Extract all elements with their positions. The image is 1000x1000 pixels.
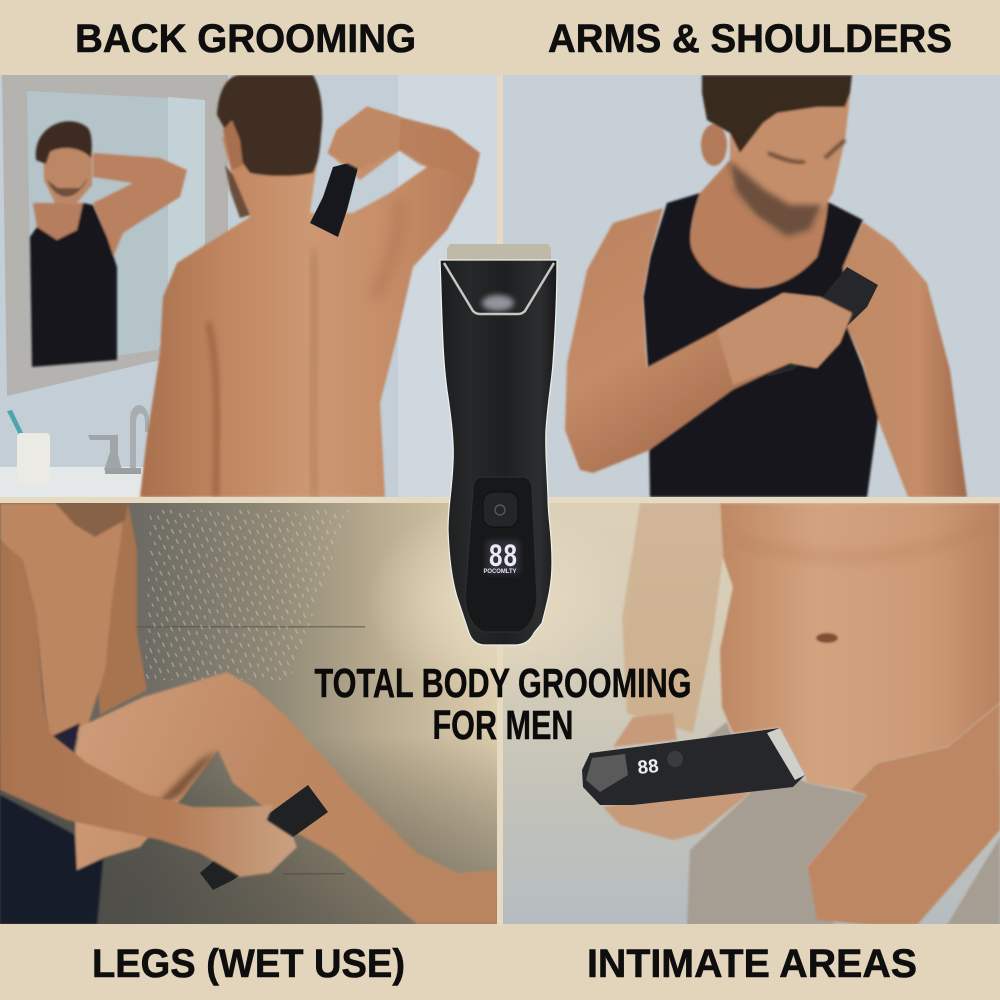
man in shower (0, 503, 497, 924)
small trimmer (767, 267, 878, 377)
panel: intimate areas photo (503, 503, 1000, 925)
shadow under knee (159, 750, 216, 802)
trimmer held horizontally: 88 (637, 756, 660, 779)
heading: legs: LEGS (WET USE) (92, 942, 405, 986)
heading: arms and shoulders: ARMS & SHOULDERS (548, 17, 952, 61)
toothbrush (7, 410, 23, 434)
cutting blade (447, 244, 551, 260)
faucet (130, 405, 149, 470)
heading: intimate areas: INTIMATE AREAS (587, 942, 917, 986)
shorts top (48, 723, 80, 752)
raised leg (75, 672, 497, 924)
centre caption: FOR MEN (432, 702, 574, 748)
panel: back grooming photo (0, 75, 497, 497)
man in black tank top (643, 75, 967, 497)
centre caption (314, 660, 692, 748)
beard (55, 503, 128, 537)
horizontal gutter (0, 497, 1000, 503)
vertical gutter (497, 75, 503, 925)
tank top (643, 193, 878, 497)
centre caption: TOTAL BODY GROOMING (314, 660, 692, 706)
display brand text: POCOMLTY (484, 568, 517, 575)
main product trimmer: 88 (488, 539, 518, 576)
small trimmer on shin (200, 785, 328, 890)
hand gripping trimmer (328, 107, 400, 170)
ear (701, 124, 727, 166)
panel: legs wet use photo (0, 503, 497, 924)
eye and brow shadows (768, 140, 845, 162)
footer band (0, 925, 1000, 1000)
beard (729, 160, 822, 237)
main product trimmer (440, 244, 557, 645)
trimmer body (440, 260, 557, 645)
heading: back grooming: BACK GROOMING (75, 17, 416, 61)
towel (687, 722, 1000, 925)
face (730, 95, 850, 237)
header band (0, 0, 1000, 75)
left arm and hand (565, 208, 852, 473)
man seen from back (140, 75, 480, 497)
small trimmer on neck (310, 160, 360, 237)
LED light (482, 295, 514, 311)
hand at hip (807, 703, 1000, 925)
control panel (465, 477, 537, 632)
right arm (843, 222, 967, 497)
torso (0, 503, 122, 738)
far arm (95, 503, 147, 715)
bare torso (720, 503, 1000, 790)
hair (702, 75, 852, 153)
shower spray (145, 510, 350, 680)
sink and cup (0, 405, 220, 497)
neck and chest (691, 160, 828, 288)
cup (17, 433, 50, 467)
mirror (2, 75, 228, 396)
power button (483, 492, 518, 527)
panel: arms and shoulders photo (503, 75, 1000, 497)
lower shorts (0, 795, 103, 924)
trimmer held horizontally (582, 728, 805, 805)
digital display (486, 540, 520, 574)
centre product glow (365, 500, 635, 700)
tile lines (135, 626, 365, 628)
holding hand (603, 713, 750, 840)
silver V accent (444, 263, 554, 314)
mirror reflection of man (30, 121, 187, 367)
faded arm (622, 503, 723, 733)
